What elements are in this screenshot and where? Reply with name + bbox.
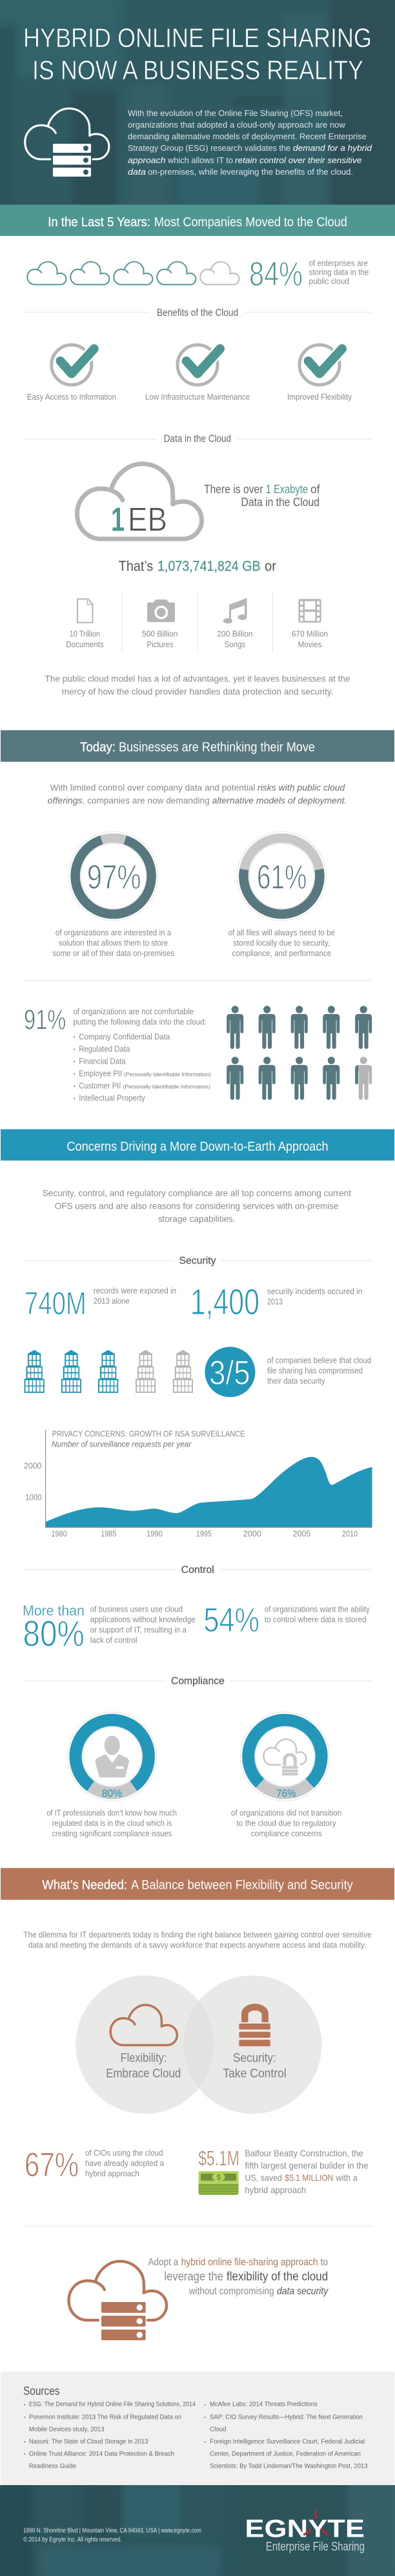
y axis labels: 1000 [25, 1493, 41, 1502]
icon: music note [223, 598, 247, 623]
intro text: demand for a hybrid [293, 143, 372, 153]
caption: of IT professionals don’t know how much [46, 1809, 177, 1818]
donut stat: 80% IT professionals [46, 1712, 177, 1839]
text: today intro: alternative models of deployment. [212, 795, 347, 806]
source list: left column: Nasuni: The State of Cloud Storage in 2013 [29, 2437, 148, 2445]
caption: compliance concerns [251, 1830, 322, 1839]
label: songs: 200 Billion [217, 630, 253, 639]
list: sensitive data types: Employee PII [79, 1068, 122, 1078]
flexibility: cloud: Flexibility: [121, 2051, 167, 2065]
caption: putting the following data into the cloud: [73, 1017, 207, 1026]
caption [267, 1356, 371, 1386]
text: today intro: offerings [48, 795, 83, 806]
stat: more than 80%: applications without knowledge [90, 1615, 196, 1625]
stat: 54% [203, 1601, 370, 1639]
text: adopt hybrid: Adopt a [148, 2257, 179, 2268]
intro text: retain control over their sensitive [235, 155, 361, 165]
icon: film strip [298, 599, 321, 623]
stat: 740M records: records were exposed in [94, 1287, 176, 1296]
text: Balfour Beatty: with a [335, 2172, 358, 2183]
source list: left column: Mobile Devices study, 2013 [29, 2425, 105, 2433]
badge: 3/5: 3/5 [209, 1354, 250, 1392]
x axis labels: 2000 [243, 1529, 261, 1538]
gigabyte statement: or [265, 558, 276, 574]
donut stat: 80% IT professionals: 80% [102, 1788, 123, 1799]
stat caption: storing data in the [309, 268, 369, 277]
donut stat: 97% [52, 832, 174, 958]
label: pictures: Pictures [147, 640, 173, 649]
list: sensitive data types: Intellectual Property [79, 1093, 145, 1102]
section band: last 5 years: Most Companies Moved to the Cloud [154, 215, 347, 229]
donut stat: 61%: 61% [257, 858, 307, 896]
text: adopt hybrid: hybrid online file-sharing approach [181, 2257, 318, 2268]
caption: creating significant compliance issues [52, 1830, 172, 1839]
panel: sources [1, 2372, 394, 2485]
text: adopt hybrid: without compromising [188, 2286, 274, 2297]
x axis labels: 1985 [101, 1529, 116, 1538]
text: today intro: risks with public cloud [258, 783, 346, 793]
chart title: Number of surveillance requests per year [52, 1439, 192, 1449]
donut stat: 97%: 97% [87, 858, 141, 896]
x axis labels: 2010 [342, 1529, 358, 1538]
gigabyte statement: 1,073,741,824 GB [157, 558, 261, 574]
section band: today [1, 730, 394, 762]
caption: their data security [267, 1377, 325, 1386]
icon: person [96, 1735, 129, 1777]
text: dilemma: data and meeting the demands of a savvy workforce that expects anywhere access and data mobility. [28, 1940, 367, 1949]
stat: more than 80%: of business users use cloud [90, 1605, 183, 1614]
subheading: control: Control [181, 1565, 214, 1576]
x axis labels: 1990 [147, 1529, 163, 1538]
stat: more than 80%: or support of IT, resulting in a [90, 1626, 187, 1635]
stat: 91%: 91% [24, 1004, 66, 1036]
section band: today: Businesses are Rethinking their Move [119, 741, 315, 755]
subheading: data in the cloud: Data in the Cloud [164, 433, 231, 445]
caption [52, 928, 174, 958]
stat: 91% [24, 1004, 372, 1102]
logo: Egnyte: Enterprise File Sharing [266, 2541, 365, 2554]
stat: 67% CIOs: hybrid approach [85, 2169, 139, 2178]
list: sensitive data types [74, 1031, 211, 1102]
stat: more than 80%: More than [23, 1603, 85, 1619]
label: movies: Movies [298, 640, 321, 649]
address [23, 2527, 201, 2543]
security: lock [223, 2007, 287, 2081]
text: public cloud summary: The public cloud model has a lot of advantages, yet it leaves businesses at the [45, 674, 350, 684]
intro text: With the evolution of the Online File Sharing (OFS) market, [128, 108, 343, 118]
label: documents: Documents [66, 640, 104, 649]
caption: some or all of their data on-premises [52, 949, 174, 958]
source list: right column: SAP: CIO Survey Results—Hybrid: The Next Generation [210, 2413, 363, 2421]
list: sensitive data types: Regulated Data [79, 1044, 130, 1053]
caption: of organizations did not transition [231, 1809, 341, 1818]
text: concerns intro [43, 1188, 351, 1224]
heading: sources: Sources [23, 2385, 59, 2397]
subheading: benefits of the cloud: Benefits of the Cloud [157, 307, 238, 318]
exabyte statement: of [310, 483, 321, 496]
stat: 1,400 incidents: 2013 [267, 1298, 283, 1307]
caption [46, 1809, 177, 1839]
stat: 1,400 incidents: 1,400 [190, 1282, 259, 1323]
logo: Egnyte [245, 2510, 365, 2554]
label: pictures: 500 Billion [142, 630, 177, 639]
text: dilemma: The dilemma for IT departments today is finding the right balance between gaining control over sensitive [23, 1930, 372, 1939]
chart title: PRIVACY CONCERNS: GROWTH OF NSA SURVEILLANCE [52, 1429, 245, 1438]
icon: document [77, 599, 92, 623]
caption [73, 1007, 207, 1026]
section band: last 5 years: In the Last 5 Years: [48, 215, 150, 229]
caption: of companies believe that cloud [267, 1356, 371, 1365]
icon: five buildings [25, 1350, 193, 1393]
text: public cloud summary: mercy of how the cloud provider handles data protection and security. [62, 687, 333, 697]
benefit: easy access [27, 345, 116, 402]
exabyte statement: Data in the Cloud [241, 496, 319, 509]
icon: ten people, nine filled [227, 1006, 372, 1100]
text: public cloud summary [45, 674, 350, 697]
source list: right column: Center, Department of Justice, Federation of American [210, 2450, 361, 2457]
stat: more than 80%: 80% [23, 1613, 85, 1654]
stat: 67% CIOs [25, 2146, 164, 2184]
x axis labels: 1995 [196, 1529, 212, 1538]
label: pictures [142, 630, 177, 649]
stat: more than 80%: lack of control [90, 1636, 137, 1645]
label: movies [292, 630, 328, 649]
label: songs [217, 630, 253, 649]
caption [228, 928, 335, 958]
header panel [0, 0, 395, 213]
text: adopt hybrid: leverage the [164, 2270, 223, 2284]
text: Balfour Beatty [245, 2148, 369, 2195]
stat: $5.1M savings [198, 2147, 369, 2195]
section band: concerns [1, 1129, 394, 1160]
subheading: compliance: Compliance [171, 1675, 225, 1686]
intro text: data [128, 167, 146, 177]
source list: right column [205, 2401, 368, 2470]
intro text: organizations that adopted a cloud-only approach are now [128, 120, 346, 130]
source list: left column: Online Trust Alliance: 2014 Data Protection & Breach [29, 2450, 174, 2457]
venn diagram [76, 1975, 322, 2114]
panel: benefits [27, 345, 352, 402]
panel: data equivalents [66, 591, 328, 653]
intro text: approach [128, 155, 165, 165]
text: Balfour Beatty: fifth largest general builder in the [245, 2160, 369, 2171]
chart area [46, 1457, 372, 1527]
benefit: easy access: Easy Access to Information [27, 393, 116, 402]
benefit: low maintenance: Low Infrastructure Maintenance [145, 393, 250, 402]
source list: left column: Readiness Guide [29, 2462, 76, 2470]
text: today intro: , companies are now demanding [83, 795, 210, 806]
benefit: improved flexibility: Improved Flexibility [287, 393, 352, 402]
stat: 740M records [25, 1285, 176, 1322]
stat: 3/5 companies [25, 1347, 371, 1397]
subheading: security: Security [179, 1256, 216, 1267]
stat: 54%: of organizations want the ability [265, 1605, 370, 1614]
stat: 54%: 54% [203, 1601, 259, 1639]
flexibility: cloud: Embrace Cloud [106, 2067, 181, 2081]
area chart: NSA surveillance [24, 1429, 372, 1538]
stat caption: of enterprises are [309, 259, 368, 268]
icon: five clouds [26, 262, 239, 285]
section band: what's needed: A Balance between Flexibility and Security [131, 1878, 353, 1893]
source list: right column: Cloud [210, 2425, 227, 2433]
stat: 740M records: 740M [25, 1285, 86, 1322]
y axis labels [24, 1461, 41, 1502]
x axis labels [51, 1529, 358, 1538]
text: Balfour Beatty: US, saved [245, 2172, 282, 2183]
exabyte statement [204, 483, 321, 509]
exabyte statement: 1 Exabyte [266, 483, 308, 496]
source list: left column [24, 2401, 196, 2470]
icon: 1EB cloud: EB [128, 501, 167, 538]
exabyte statement: There is over [204, 483, 263, 496]
text: today intro: With limited control over company data and potential [50, 783, 255, 793]
text: concerns intro: Security, control, and regulatory compliance are all top concerns among current [43, 1188, 351, 1198]
footer background photo [0, 2482, 395, 2576]
stat: 67% CIOs: have already adopted a [85, 2159, 164, 2168]
stat: $5.1M savings: $5.1M [198, 2147, 239, 2170]
icon: cloud with lock [263, 1739, 306, 1775]
section band: today: Today: [80, 741, 116, 755]
caption: regulated data is in the cloud which is [52, 1819, 172, 1828]
caption: compliance, and performance [232, 949, 331, 958]
stat caption: public cloud [309, 277, 349, 286]
section band: last 5 years [0, 205, 395, 236]
label: movies: 670 Million [292, 630, 328, 639]
text: adopt hybrid: data security [277, 2286, 329, 2297]
stat: 1,400 incidents [190, 1282, 362, 1323]
source list: right column: McAfee Labs: 2014 Threats Predictions [210, 2401, 318, 2408]
icon: 1EB cloud: 1 [111, 501, 125, 538]
chart title [52, 1429, 245, 1449]
benefit: low maintenance [145, 345, 250, 402]
source list: right column: Scientists: By Todd Lindeman/The Washington Post, 2013 [210, 2462, 368, 2470]
text: adopt hybrid: to [320, 2257, 328, 2268]
icon: camera [147, 600, 175, 622]
address: © 2014 by Egnyte Inc. All rights reserved. [23, 2536, 121, 2543]
intro text: demanding alternative models of deployment. Recent Enterprise [128, 132, 367, 141]
stat: 740M records: 2013 alone [94, 1297, 130, 1306]
icon: money stack [199, 2171, 239, 2195]
footer panel [0, 2482, 395, 2576]
stat: more than 80% [23, 1603, 196, 1654]
list: sensitive data types: Company Confidential Data [79, 1031, 170, 1041]
stat: 84%: 84% [249, 255, 303, 293]
text: concerns intro: OFS users and are also reasons for considering services with on-premise [55, 1201, 339, 1211]
badge: 3/5 [205, 1347, 255, 1397]
benefit: improved flexibility [287, 345, 352, 402]
flexibility: cloud [106, 2005, 181, 2081]
text: dilemma [23, 1930, 372, 1949]
text: adopt hybrid [148, 2257, 329, 2297]
list: sensitive data types: Customer PII [79, 1080, 121, 1090]
icon: copper cloud with server [69, 2261, 167, 2340]
cloud row: 84 percent [26, 255, 369, 293]
caption: solution that allows them to store [59, 939, 168, 948]
security: lock: Take Control [223, 2067, 287, 2081]
intro text: Strategy Group (ESG) research validates the [128, 143, 290, 153]
x axis labels: 1980 [51, 1529, 67, 1538]
caption: to the cloud due to regulatory [236, 1819, 336, 1828]
donut stat: 76% organizations [231, 1712, 341, 1839]
header background photo [0, 0, 395, 213]
x axis labels: 2005 [293, 1529, 310, 1538]
label: songs: Songs [225, 640, 245, 649]
text: Balfour Beatty: hybrid approach [245, 2185, 306, 2195]
intro text: which allows IT to [167, 155, 233, 165]
security: lock: Security: [233, 2051, 276, 2065]
gigabyte statement: That’s [119, 558, 153, 574]
source list: left column: ESG: The Demand for Hybrid Online File Sharing Solutions, 2014 [29, 2401, 196, 2408]
caption [231, 1809, 341, 1839]
stat: 54%: to control where data is stored [265, 1615, 367, 1625]
stat: 67% CIOs: 67% [25, 2146, 79, 2184]
source list: left column: Ponemon Institute: 2013 The Risk of Regulated Data on [29, 2413, 181, 2421]
icon: money stack: $ [217, 2172, 221, 2181]
section band: what's needed [1, 1868, 394, 1900]
donut stat: 76% organizations: 76% [276, 1788, 296, 1799]
text: Balfour Beatty: $5.1 MILLION [285, 2172, 333, 2183]
list: sensitive data types: Financial Data [79, 1056, 126, 1066]
label: documents [66, 630, 104, 649]
section band: concerns: Concerns Driving a More Down-to-Earth Approach [66, 1140, 329, 1154]
section band: what's needed: What’s Needed: [42, 1878, 127, 1893]
list: sensitive data types: (Personally Identifiable Information) [123, 1083, 210, 1089]
text: today intro [48, 783, 347, 806]
caption: file sharing has compromised [267, 1367, 363, 1376]
address: 1890 N. Shoreline Blvd | Mountain View, CA 94043, USA | www.egnyte.com [23, 2527, 201, 2534]
icon: 1EB cloud [77, 464, 201, 539]
logo: Egnyte: EGNYTE [245, 2515, 365, 2543]
call to action [69, 2257, 329, 2340]
intro text: on-premises, while leveraging the benefits of the cloud. [148, 167, 353, 177]
stat caption [309, 259, 369, 286]
source list: right column: Foreign Intelligence Surveillance Court, Federal Judicial [210, 2437, 365, 2445]
icon: cloud with server [25, 108, 109, 177]
text: concerns intro: storage capabilities. [158, 1214, 236, 1224]
stat: 1,400 incidents: security incidents occured in [267, 1287, 362, 1296]
label: documents: 10 Trillion [70, 630, 100, 639]
stat: 67% CIOs: of CIOs using the cloud [85, 2149, 163, 2158]
y axis labels: 2000 [24, 1461, 41, 1470]
caption: of all files will always need to be [228, 928, 335, 937]
text: Balfour Beatty: Balfour Beatty Construction, the [245, 2148, 363, 2158]
donut stat: 61% [228, 832, 335, 958]
caption: of organizations are not comfortable [73, 1007, 194, 1016]
caption: stored locally due to security, [233, 939, 330, 948]
caption: of organizations are interested in a [56, 928, 171, 937]
text: adopt hybrid: flexibility of the cloud [227, 2270, 328, 2284]
list: sensitive data types: (Personally Identifiable Information) [124, 1071, 211, 1077]
intro text [128, 108, 372, 177]
title [23, 23, 372, 85]
